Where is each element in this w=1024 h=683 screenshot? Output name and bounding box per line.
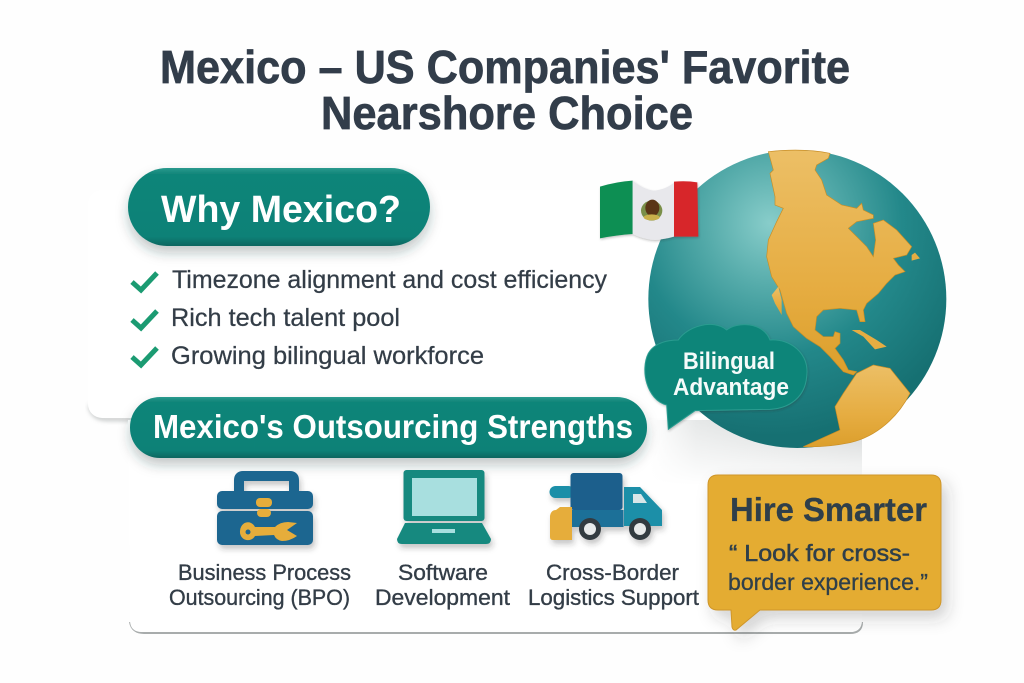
callout: Bilingual Advantage: Bilingual [683, 348, 775, 375]
heading pill: Why Mexico?: Why Mexico? [161, 189, 401, 231]
map: South America [803, 365, 910, 447]
label: Cross-Border Logistics Support: Cross-Border [546, 560, 679, 585]
label: Software Development [375, 560, 510, 610]
title [160, 41, 850, 139]
label: Cross-Border Logistics Support [528, 560, 699, 610]
globe with Americas [648, 150, 946, 448]
panel: outsourcing strengths card [128, 420, 960, 636]
callout: Bilingual Advantage [645, 324, 807, 429]
label: Business Process Outsourcing: Outsourcing (BPO) [169, 585, 350, 610]
map: North America [767, 150, 912, 375]
callout: Hire Smarter [708, 475, 941, 630]
label: Business Process Outsourcing [169, 560, 351, 610]
icon: check 2 [132, 311, 157, 328]
icon: check 1 [132, 273, 157, 290]
title: Mexico – US Companies' Favorite [160, 41, 850, 93]
map: Caribbean islands [852, 330, 887, 349]
icon: delivery truck [550, 473, 662, 540]
label: Software Development: Software [398, 560, 488, 585]
item: timezone: Timezone alignment and cost efficiency [172, 266, 607, 294]
label: Cross-Border Logistics Support: Logistics Support [528, 585, 699, 610]
label: Software Development: Development [375, 585, 510, 610]
callout: Hire Smarter: “ Look for cross- [729, 540, 910, 566]
item: talent: Rich tech talent pool [171, 304, 400, 332]
heading pill: Mexico's Outsourcing Strengths: Mexico's Outsourcing Strengths [153, 408, 633, 445]
title: Nearshore Choice [321, 87, 693, 139]
heading pill: Mexico's Outsourcing Strengths [130, 397, 647, 458]
icon: Mexican flag [600, 181, 698, 240]
item: bilingual: Growing bilingual workforce [171, 342, 484, 370]
panel: why Mexico background card [88, 190, 728, 419]
map: Newfoundland [912, 253, 920, 261]
map: Baja California [772, 287, 782, 315]
icon: check 3 [132, 348, 157, 365]
label: Business Process Outsourcing: Business Process [178, 560, 351, 585]
heading pill: Why Mexico? [128, 168, 430, 246]
icon: laptop [397, 470, 491, 544]
callout: Bilingual Advantage: Advantage [673, 374, 789, 401]
callout: Hire Smarter: border experience.” [728, 569, 928, 595]
icon: toolbox [217, 476, 313, 545]
callout: Hire Smarter: Hire Smarter [730, 491, 927, 528]
checklist: reasons [132, 266, 607, 370]
